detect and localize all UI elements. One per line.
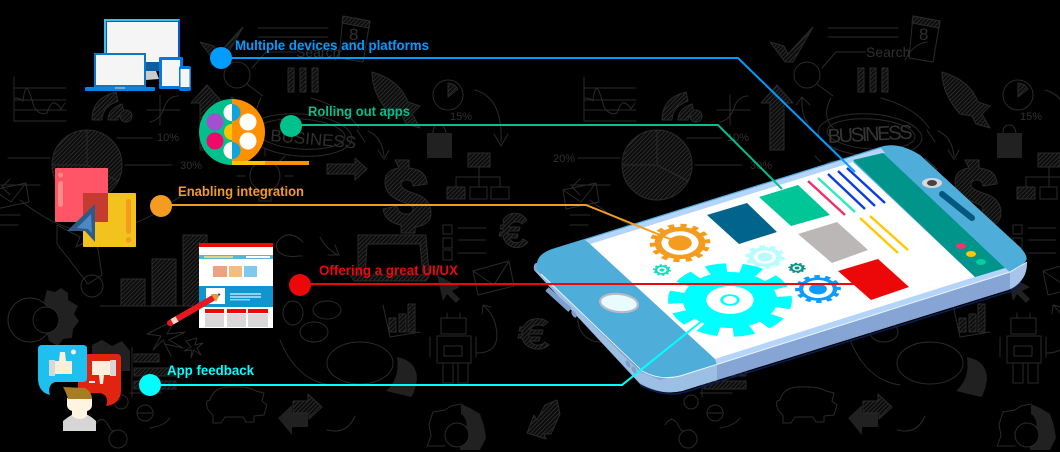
background doodles: 15% [1020, 111, 1042, 123]
big cyan gear [673, 266, 787, 334]
icon: app wheel [199, 99, 309, 165]
connector line: app feedback [150, 320, 703, 385]
label: rolling out apps: Rolling out apps [308, 104, 410, 119]
node dot: UI/UX [289, 274, 311, 296]
teal band [853, 153, 1005, 277]
node dot: app feedback [139, 374, 161, 396]
icon: pencil [170, 294, 220, 323]
small teal gear [789, 263, 805, 273]
phone top face [536, 145, 1027, 378]
yellow stripes [860, 216, 908, 253]
background doodles: 8 [349, 25, 358, 44]
grey tile [798, 222, 868, 263]
background doodles: BUSINESS [270, 126, 357, 152]
connector line: rolling out apps [291, 125, 782, 189]
phone side edge [534, 262, 1027, 392]
label: enabling integration: Enabling integration [178, 184, 304, 199]
label: multiple devices: Multiple devices and platforms [235, 38, 429, 53]
background doodles: 30% [750, 160, 772, 172]
red tile [838, 259, 909, 300]
node dot: multiple devices [210, 47, 232, 69]
green tile [759, 185, 830, 226]
speaker [942, 194, 972, 218]
screen frame [585, 148, 1010, 365]
home button [599, 292, 639, 314]
icon: web page mockup [199, 243, 273, 328]
orange gear [647, 222, 713, 264]
monitor [104, 19, 180, 80]
background doodles: 10% [157, 132, 179, 144]
phone illustration [534, 145, 1027, 394]
indicator dots [956, 243, 986, 265]
icon: integration squares [55, 168, 136, 247]
background doodles: Search [296, 44, 340, 60]
label: app feedback: App feedback [167, 363, 254, 378]
background doodles: 20% [553, 153, 575, 165]
blue gear [794, 274, 842, 304]
person [63, 387, 96, 431]
background doodles: 15% [450, 111, 472, 123]
dark blue tile [707, 203, 777, 244]
icon: devices [85, 19, 191, 91]
side buttons [547, 289, 638, 374]
thumbs up bubble [38, 345, 87, 395]
connector line: great UI/UX [300, 283, 855, 285]
background doodles: 30% [180, 160, 202, 172]
small mint gear [654, 265, 670, 275]
laptop [85, 53, 155, 91]
background doodles: BUSINESS [827, 122, 913, 148]
phone small [179, 66, 191, 91]
node dot: enabling integration [150, 195, 172, 217]
tablet [159, 57, 183, 89]
background doodles: Search [866, 44, 910, 60]
thumbs down bubble [78, 354, 121, 406]
background doodles: 8 [919, 25, 928, 44]
icon: feedback bubbles [38, 345, 121, 431]
pale cyan gear [747, 246, 783, 268]
connector line: enabling integration [161, 205, 680, 243]
background doodles: 10% [727, 132, 749, 144]
node dot: rolling out apps [280, 115, 302, 137]
screen [590, 162, 975, 359]
camera [922, 178, 942, 188]
pink and blue stripes [808, 168, 885, 215]
label: great UI/UX: Offering a great UI/UX [319, 263, 458, 278]
connector line: multiple devices [221, 58, 855, 172]
